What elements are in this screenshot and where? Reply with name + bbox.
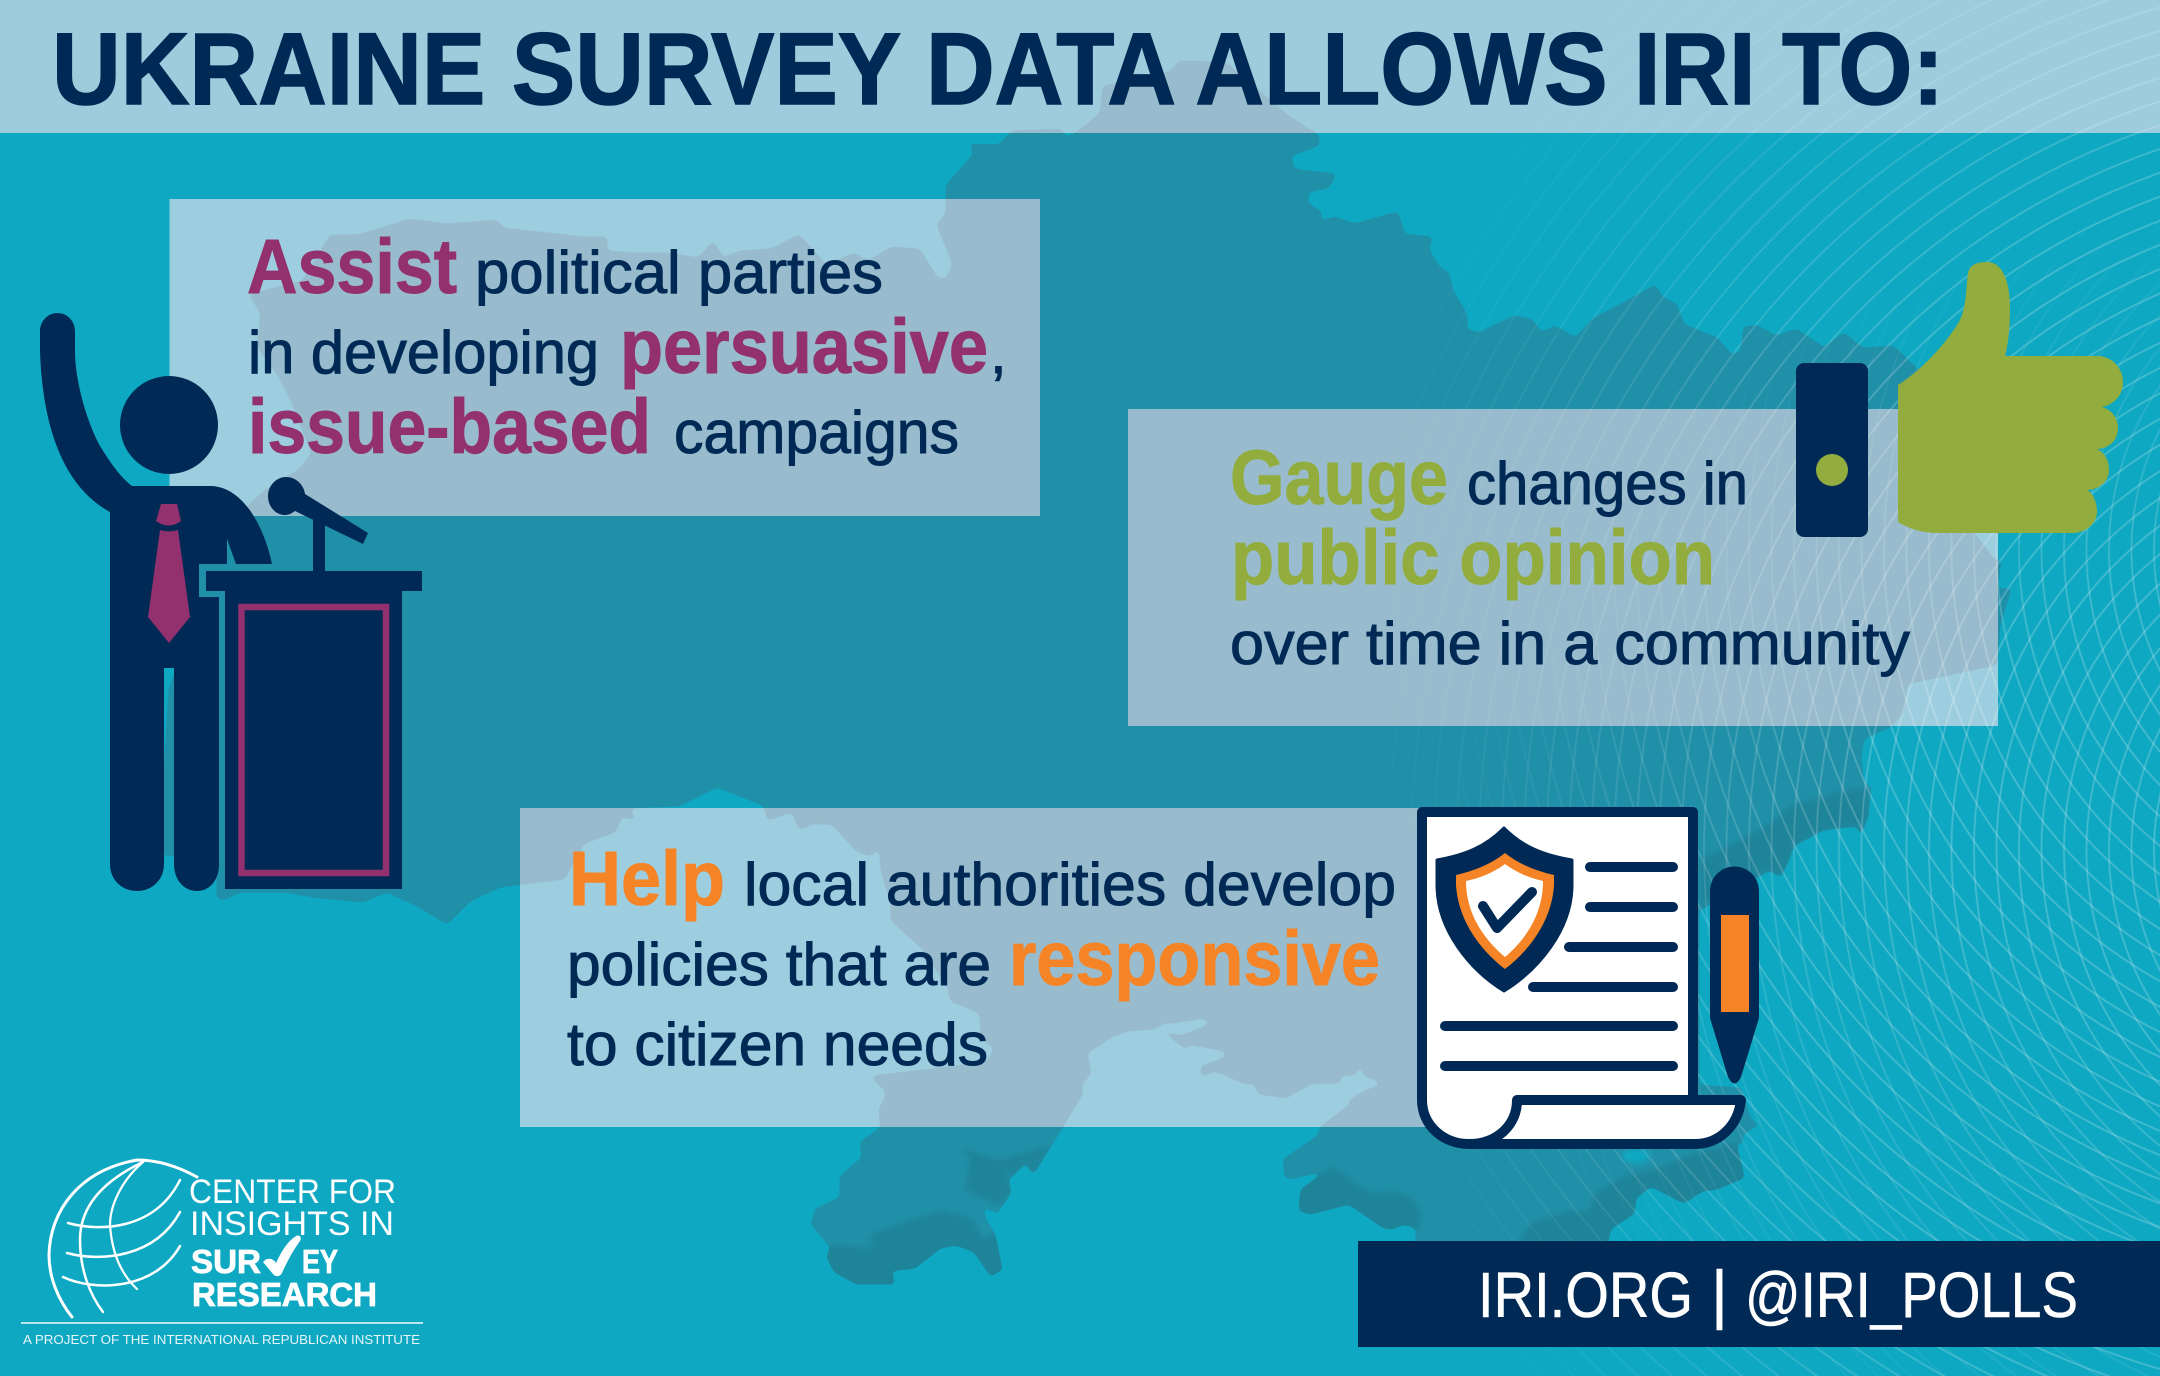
text block: gauge: changes in xyxy=(1467,450,1748,517)
text block: assist: , xyxy=(990,319,1007,386)
page xyxy=(1422,812,1693,1144)
logo tagline: A PROJECT OF THE INTERNATIONAL REPUBLICAN INSTITUTE xyxy=(23,1332,420,1347)
text block: gauge: over time in a community xyxy=(1230,610,1910,677)
text block: assist: in developing xyxy=(248,319,599,386)
radial line pattern, family one xyxy=(1436,0,2160,1376)
panel: assist background xyxy=(170,199,1040,516)
text block: help: Help xyxy=(569,836,725,922)
text block: assist xyxy=(247,224,1007,470)
panel: gauge background xyxy=(1128,409,1998,726)
text block: gauge: public opinion xyxy=(1231,515,1715,601)
footer links: | xyxy=(1711,1257,1728,1330)
text block: help xyxy=(567,836,1396,1078)
cuff xyxy=(1796,363,1868,537)
footer links xyxy=(1478,1257,2078,1331)
icon: document with shield and pen xyxy=(1422,812,1759,1144)
tie xyxy=(148,504,190,643)
page text lines xyxy=(1445,867,1673,1066)
cuff dot xyxy=(1816,454,1848,486)
text block: help: local authorities develop xyxy=(744,851,1396,918)
map of Ukraine xyxy=(160,62,2010,1283)
microphone xyxy=(268,477,368,571)
hand xyxy=(1898,262,2123,533)
text block: help: to citizen needs xyxy=(567,1011,988,1078)
text block: assist: persuasive xyxy=(620,304,988,390)
text block: assist: Assist xyxy=(247,224,457,310)
logo: center for insights in survey research xyxy=(21,1160,423,1347)
text block: assist: campaigns xyxy=(674,399,959,466)
shield xyxy=(1437,828,1572,991)
text block: assist: issue-based xyxy=(248,384,651,470)
map tint through header and panels xyxy=(248,60,1998,1127)
title: UKRAINE SURVEY DATA ALLOWS IRI TO: xyxy=(52,12,1944,126)
logo: center for insights in survey research: EY xyxy=(302,1243,338,1280)
header band xyxy=(0,0,2160,133)
panel: help background xyxy=(520,808,1425,1127)
logo name light: CENTER FOR xyxy=(189,1173,396,1211)
icon: thumbs up xyxy=(1796,262,2123,537)
text block: gauge xyxy=(1230,435,1910,677)
pen xyxy=(1710,866,1759,1084)
footer links: IRI.ORG xyxy=(1478,1259,1693,1331)
check mark xyxy=(1483,892,1532,928)
text block: help: responsive xyxy=(1009,916,1380,1002)
speaker head xyxy=(120,376,218,474)
text block: help: policies that are xyxy=(567,931,991,998)
text block: gauge: Gauge xyxy=(1230,435,1448,521)
text block: assist: political parties xyxy=(475,239,883,306)
scroll strip xyxy=(1469,1100,1741,1144)
radial line pattern, family two xyxy=(1479,259,2160,1376)
logo name bold: SUR xyxy=(191,1243,261,1280)
footer links: @IRI_POLLS xyxy=(1745,1259,2078,1331)
podium frame xyxy=(242,607,386,873)
logo: center for insights in survey research: INSIGHTS IN xyxy=(190,1205,394,1243)
podium outline gap xyxy=(199,564,272,891)
icon: speaker at podium xyxy=(40,313,422,891)
globe xyxy=(49,1160,197,1317)
footer bar xyxy=(1358,1241,2160,1347)
speaker body with raised arm xyxy=(40,313,272,891)
pen band xyxy=(1721,915,1749,1012)
logo: center for insights in survey research: RESEARCH xyxy=(192,1276,377,1313)
podium xyxy=(206,571,422,889)
